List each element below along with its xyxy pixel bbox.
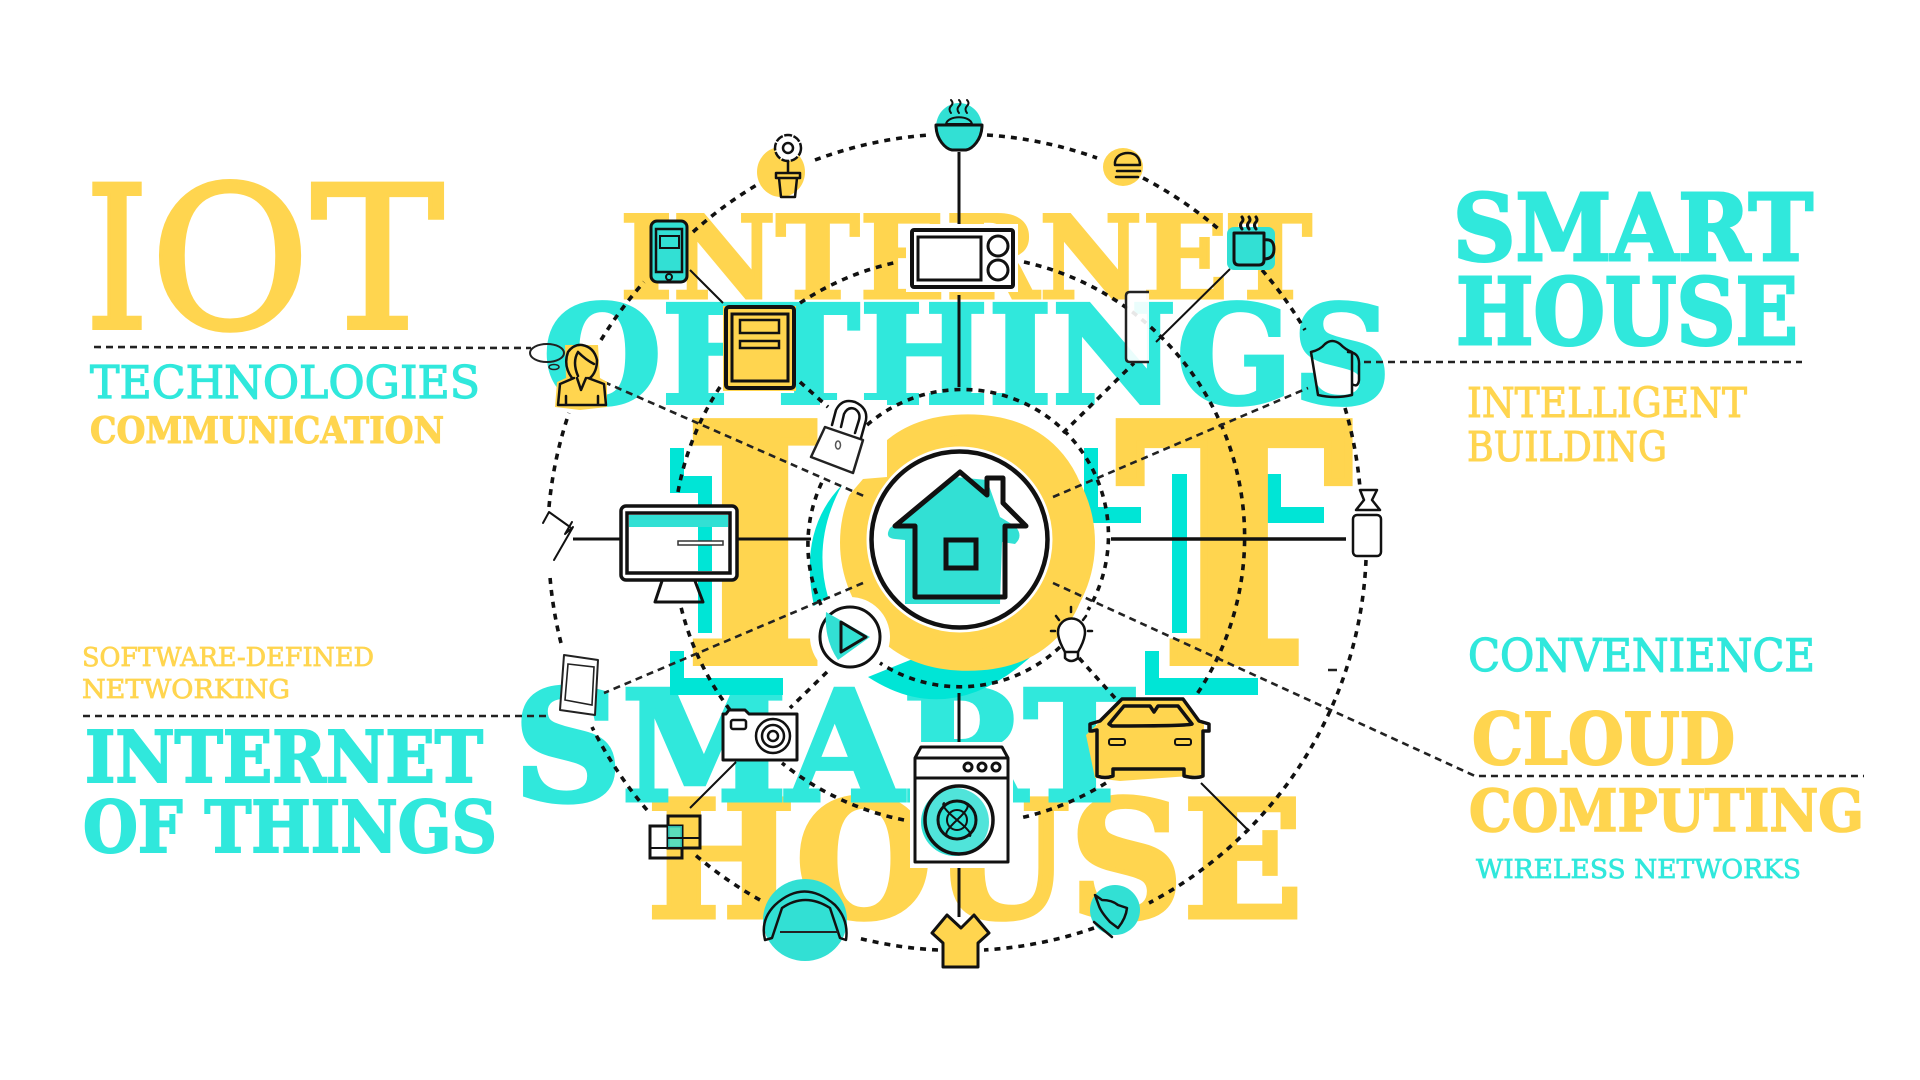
center word: IOT large: I [682,353,828,740]
icon: padlock [811,401,866,473]
text: software-defined networking [82,643,374,705]
icon: house [888,472,1026,604]
icon: washing machine [910,742,1013,868]
text: convenience: CONVENIENCE [1468,629,1815,682]
connector lines: short dashed spokes [790,363,1134,708]
center word: smart: SMART [514,657,1135,836]
icon: microwave [906,224,1018,292]
icon: overlapping squares [650,816,700,858]
heading: smart house right [1453,174,1813,366]
heading: IOT left: T [311,144,444,375]
icon: monitor [621,506,737,602]
heading: internet of things left [83,715,497,869]
icon: kettle [1311,341,1359,397]
heading: smart house right: HOUSE [1456,258,1798,366]
heading: smart house right: SMART [1453,174,1813,282]
text: communication: COMMUNICATION [90,410,444,452]
center word: of things: OFTHINGS [543,276,1391,436]
text: technologies: TECHNOLOGIES [90,356,480,409]
center word: IOT large [682,348,1352,746]
icon: play button [820,607,880,667]
heading: computing: COMPUTING [1469,777,1864,845]
icon: oven mitt [1090,885,1140,937]
icon: t-shirt [932,915,989,967]
icon: person [530,344,607,410]
center word: IOT large: O [832,348,1104,746]
icon: flower pot [757,135,805,197]
icon: smartphone [651,221,687,282]
center house circle [872,452,1048,628]
icon: camera [723,710,797,760]
icon: car [1086,699,1209,781]
icon: burger [1103,148,1143,186]
connector lines: solid spokes [573,152,1346,917]
icon: lower left phone [560,655,598,715]
connector lines: dashed diagonals and leaders [83,347,1864,776]
offset cyan shadow of central IOT [670,448,1324,699]
white cutouts around O [810,400,1052,677]
icon: broken device left [543,512,573,560]
icon: tablet [723,306,796,391]
cyan crescent [810,485,842,606]
rings: middle dashed circle [678,262,1245,820]
center word: house: HOUSE [647,766,1303,956]
text: wireless networks: WIRELESS NETWORKS [1476,855,1801,885]
text: intelligent building: INTELLIGENT [1467,379,1747,427]
heading: IOT left: O [150,144,310,375]
icon: bottle [1353,490,1381,556]
icon: white phone [1126,292,1149,362]
rings: inner dashed circle [808,389,1108,687]
text: intelligent building [1467,379,1747,471]
icon: mug [1227,217,1275,270]
icon: light bulb [1051,607,1092,661]
text: intelligent building: BUILDING [1467,423,1667,471]
rings: outer dashed circle [549,135,1366,950]
heading: internet of things left: OF THINGS [83,785,497,869]
icon: headphones [763,879,847,961]
heading: cloud: CLOUD [1472,697,1735,781]
stray dash mark [1328,669,1337,671]
heading: IOT left [85,144,444,375]
heading: internet of things left: INTERNET [85,715,483,799]
icon: bowl [936,100,982,151]
text: software-defined networking: NETWORKING [82,675,290,705]
center word: IOT large: T [1116,353,1352,740]
center word: internet: INTERNET [620,191,1312,325]
text: software-defined networking: SOFTWARE-DEFINED [82,643,374,673]
heading: IOT left: I [85,144,149,375]
